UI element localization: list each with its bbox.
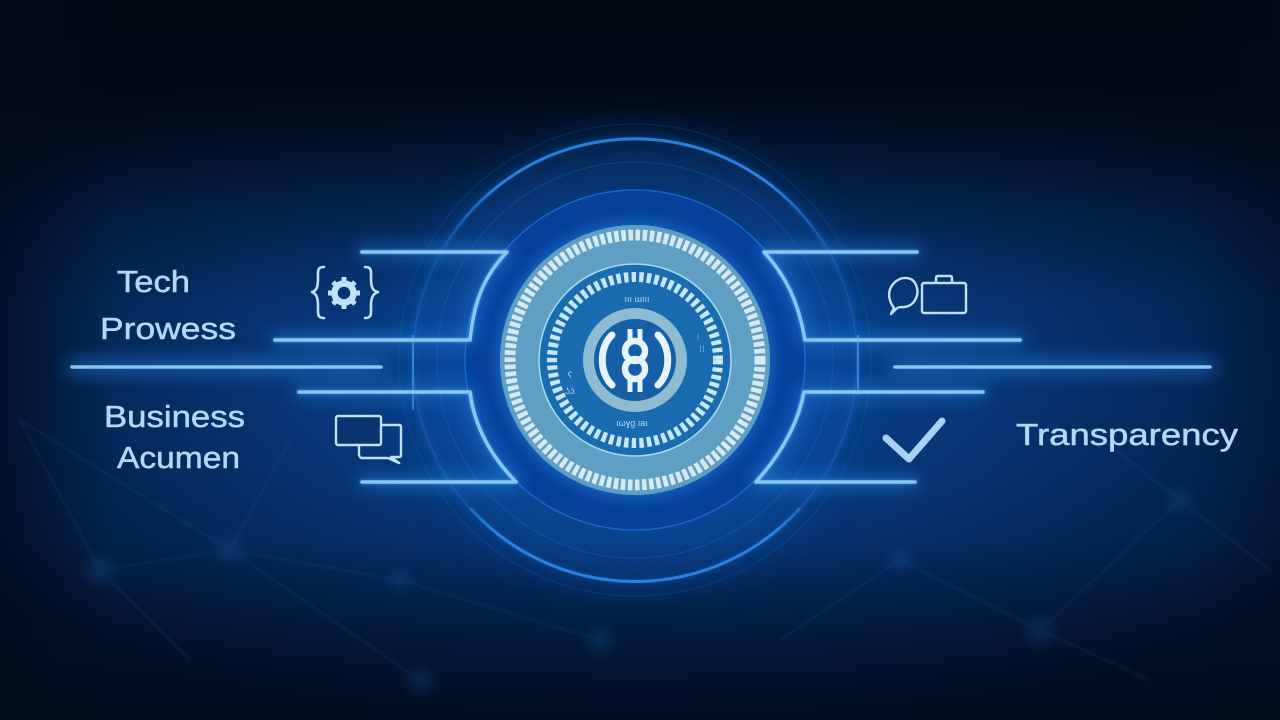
connector: bottom left (299, 392, 516, 482)
inner tick ring (552, 277, 718, 443)
micro labels: ⁝ (697, 332, 699, 342)
micro labels (566, 294, 705, 428)
label: Tech Prowess: Tech (117, 264, 190, 299)
emblem glow (495, 220, 775, 500)
divider line: right (895, 361, 1210, 373)
micro labels: ⁝⁝ (699, 344, 705, 354)
micro labels: ıωɣɡ ıaı (616, 418, 648, 428)
outer tick ring (510, 235, 760, 485)
label: Tech Prowess (100, 264, 236, 346)
central glow (410, 135, 860, 585)
central emblem (495, 220, 775, 500)
micro labels: ııı ɯııı (624, 294, 650, 304)
faint network pattern (20, 420, 1270, 692)
icon: chat windows (336, 416, 401, 463)
connector: top right (764, 252, 1020, 340)
emblem outer band (500, 225, 770, 495)
icon: bitcoin symbol (602, 329, 668, 392)
connector: top left (275, 252, 507, 340)
label: Business Acumen: Acumen (117, 440, 240, 475)
label: Transparency: Transparency (1016, 417, 1239, 452)
icon: speech bubble and briefcase (889, 276, 966, 314)
divider line: left (72, 361, 381, 373)
micro labels: ʕ (568, 370, 573, 380)
connector: bottom right (756, 392, 983, 482)
icon: check mark (886, 421, 942, 459)
label: Business Acumen: Business (104, 399, 245, 434)
label: Tech Prowess: Prowess (100, 311, 236, 346)
inner blue disc (539, 264, 731, 456)
label: Business Acumen (104, 399, 245, 475)
icon: gear in braces (312, 267, 378, 318)
outer orbit rings (399, 124, 871, 596)
dark blue disc (465, 190, 805, 530)
micro labels: ʖʖ (566, 386, 575, 396)
inner ring (588, 314, 682, 406)
